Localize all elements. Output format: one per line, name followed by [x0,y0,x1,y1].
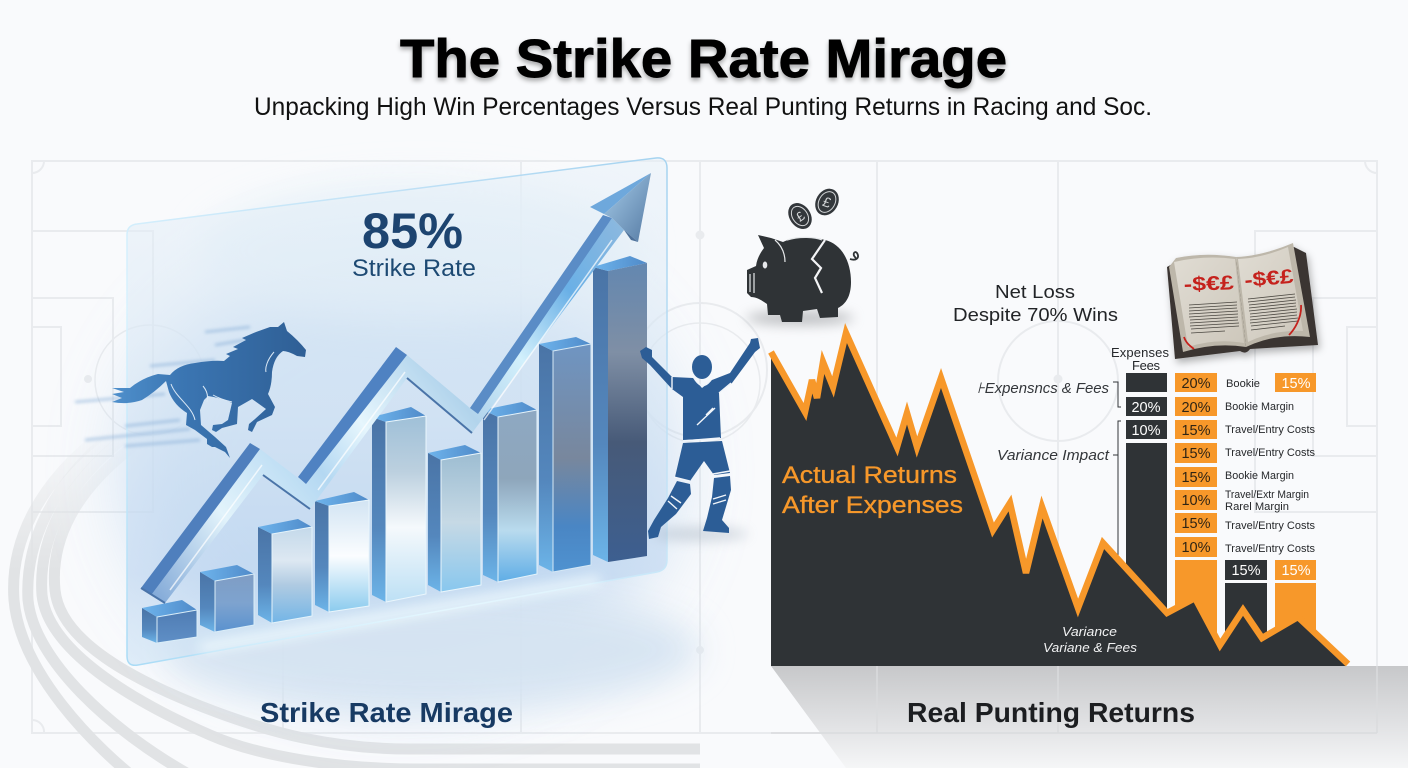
row labels: Travel/Entry Costs [1225,543,1315,555]
text: expenses and fees bracket label [977,380,1121,407]
percent values: 15% [1281,563,1311,579]
text: variance impact bracket label [997,421,1121,556]
text: strike rate: Strike Rate [352,255,476,282]
percent values: 10% [1181,493,1211,509]
text: actual returns after expenses: After Expenses [782,492,963,519]
text: variance and fees: Variance [1062,624,1117,639]
red currency loss marks: -$€£ [1183,272,1234,296]
text: variance impact bracket label: Variance Impact [997,447,1110,464]
pitch lines over shadow [771,666,1377,733]
bar 9 [593,256,647,562]
text: expenses fees column heading: Fees [1132,358,1160,373]
chart: declining returns area [771,333,1348,666]
blue glow behind left panel [130,180,700,710]
row labels: Travel/Entry Costs [1225,424,1315,436]
bar 3 [258,519,312,623]
icon: running horse [112,322,306,458]
text: net loss despite 70% wins [953,281,1118,325]
row labels: Bookie [1226,378,1260,390]
red currency loss marks: -$€£ [1244,266,1294,292]
percent values: 15% [1181,423,1211,439]
icon: falling coins: £ [793,208,808,225]
red currency loss marks [1183,266,1294,296]
icon: falling coins [783,184,844,233]
text: expenses fees column heading [1111,345,1170,373]
text: expenses and fees bracket label: ⊦Expensncs & Fees [977,380,1109,397]
text: net loss despite 70% wins: Net Loss [995,281,1075,302]
row labels: Bookie Margin [1225,401,1294,413]
bar 6 [428,445,481,592]
heading: 85%: 85% [362,203,463,259]
icon: speed streaks behind horse [75,327,250,446]
row labels: Travel/Entry Costs [1225,520,1315,532]
bar chart [142,256,647,643]
bar 1 [142,600,197,643]
text: net loss despite 70% wins: Despite 70% Wins [953,304,1118,325]
panel: strike rate mirage glass chart [127,158,667,665]
icon: falling coins: £ [821,193,834,211]
percent values: 20% [1181,400,1211,416]
book text lines [1189,294,1298,333]
icon: open ledger book [1167,243,1318,359]
text: variance and fees: Variane & Fees [1043,640,1138,655]
row labels: Travel/Extr Margin [1225,489,1309,501]
text: actual returns after expenses [782,462,963,519]
panel: real punting returns shadow [771,666,1408,768]
percent values [1131,376,1311,579]
bar 4 [315,492,369,612]
bar 7 [483,402,537,582]
text: variance and fees [1043,624,1138,655]
label: real punting returns: Real Punting Returns [907,697,1195,728]
background: racetrack curves [14,432,700,768]
icon: broken piggy bank with coins [746,184,858,325]
icon: rising zigzag arrow [141,173,651,603]
text: expenses fees column heading: Expenses [1111,345,1170,360]
percent values: 15% [1181,516,1211,532]
bar 8 [539,337,591,572]
percent values: 10% [1131,423,1161,439]
bar 2 [200,565,254,632]
percent values: 15% [1231,563,1261,579]
row labels: Travel/Entry Costs [1225,447,1315,459]
background: football pitch markings [32,161,1377,733]
icon: celebrating football player [640,338,760,541]
glass panel [127,158,667,665]
panel bottom light streak [200,580,600,648]
percent values: 10% [1181,540,1211,556]
percent values: 15% [1181,470,1211,486]
percent values: 20% [1181,376,1211,392]
text: actual returns after expenses: Actual Returns [782,462,957,489]
subtitle: Unpacking High Win Percentages Versus Real Punting Returns in Racing and Soc. [254,93,1152,121]
percent values: 15% [1181,446,1211,462]
percent values: 15% [1281,376,1311,392]
dark column [1126,373,1267,653]
orange columns [1175,373,1316,653]
panel: expenses table [977,345,1316,653]
row labels: Bookie Margin [1225,470,1294,482]
title: The Strike Rate Mirage [400,29,1007,89]
bar 5 [372,407,426,602]
label: strike rate mirage: Strike Rate Mirage [260,697,513,728]
row labels [1225,378,1315,555]
row labels: Rarel Margin [1225,501,1289,513]
percent values: 20% [1131,400,1161,416]
